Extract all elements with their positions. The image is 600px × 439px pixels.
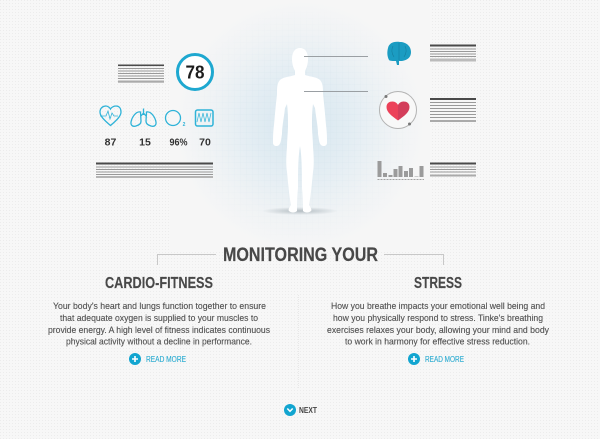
- callout line: heart: [304, 91, 368, 92]
- column divider: [298, 295, 300, 388]
- text block: cardio-fitness: [48, 301, 270, 346]
- next button: [284, 404, 318, 416]
- title: MONITORING YOUR: [223, 244, 378, 266]
- text block: stress: [327, 301, 549, 346]
- text bars: heart: [430, 98, 476, 122]
- text block: stress: to work in harmony for effective stress reduction.: [345, 336, 530, 346]
- icon: oxygen: 2: [183, 122, 186, 128]
- panel: cardio-fitness: [48, 275, 270, 365]
- text block: cardio-fitness: physical activity without a decline in performance.: [66, 336, 252, 346]
- text block: stress: exercises relaxes your body, allowing your mind and body: [327, 325, 549, 335]
- text block: cardio-fitness: provide energy. A high level of fitness indicates continuous: [48, 325, 270, 335]
- panel: stress: [327, 275, 549, 365]
- icon: brain: [387, 42, 411, 65]
- icon: body silhouette: [262, 48, 338, 215]
- body glow grid: [170, 0, 430, 250]
- text block: cardio-fitness: Your body's heart and lungs function together to ensure: [53, 301, 266, 311]
- icon: lungs: [131, 108, 156, 126]
- read more link: READ MORE: [146, 354, 186, 364]
- stat values: 70: [199, 136, 211, 148]
- text bars: stats: [96, 162, 213, 178]
- icon: heart rate: [100, 106, 121, 126]
- icon: ecg monitor: [196, 110, 213, 126]
- next button: NEXT: [299, 405, 318, 415]
- text bars: brain: [430, 44, 476, 62]
- heading connector left: [158, 254, 216, 265]
- stat values: [105, 136, 211, 148]
- text bars: chart: [430, 162, 476, 176]
- score circle 78: 78: [186, 62, 204, 82]
- icon: bar chart: [378, 161, 424, 180]
- stat values: 15: [139, 136, 151, 148]
- heading connector right: [384, 254, 444, 265]
- score circle 78: [178, 54, 212, 90]
- heading: cardio-fitness: CARDIO-FITNESS: [105, 275, 213, 292]
- stat values: 96%: [170, 136, 188, 148]
- callout line: brain: [304, 56, 368, 57]
- read more link: READ MORE: [425, 354, 464, 364]
- text block: stress: How you breathe impacts your emotional well being and: [331, 301, 545, 311]
- read more link: [408, 353, 464, 365]
- text bars: score: [118, 64, 164, 83]
- text block: stress: how you physically respond to stress. Tinke's breathing: [333, 313, 543, 323]
- stat values: 87: [105, 136, 116, 148]
- heading: stress: STRESS: [414, 275, 462, 292]
- text block: cardio-fitness: that adequate oxygen is supplied to your muscles to: [60, 313, 258, 323]
- read more link: [129, 353, 186, 365]
- icon: oxygen: [166, 110, 186, 128]
- icon: heart in circle: [380, 92, 416, 128]
